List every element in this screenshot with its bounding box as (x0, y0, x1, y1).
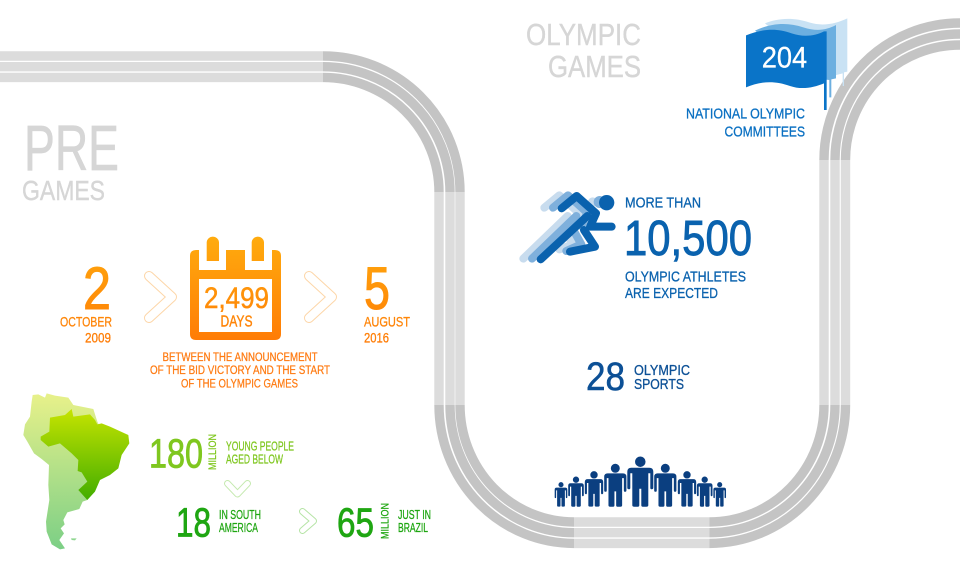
arrow: chevron to end date (309, 276, 332, 318)
icon: sprinter (523, 195, 614, 259)
date: october 2009: 2 (83, 255, 111, 322)
icon: flag with 204: 204 (762, 42, 807, 75)
arrow: chevron right (302, 512, 314, 530)
stat: 180 million young people: MILLION (207, 434, 219, 470)
heading: olympic games (526, 17, 641, 84)
stat: 28 olympic sports: SPORTS (634, 377, 684, 393)
heading: pre games: GAMES (22, 175, 105, 206)
stat: more than 10,500 athletes: 10,500 (624, 212, 752, 266)
caption: between announcement and start: OF THE BID VICTORY AND THE START (150, 365, 330, 377)
caption: between announcement and start: OF THE OLYMPIC GAMES (181, 378, 298, 390)
icon: calendar with 2,499 days: 2,499 (204, 282, 269, 315)
icon: calendar with 2,499 days (190, 237, 281, 340)
date: august 2016: AUGUST (364, 314, 410, 330)
stat: more than 10,500 athletes: OLYMPIC ATHLETES (625, 269, 746, 286)
stat: 18 in south america: 18 (176, 500, 211, 546)
heading: olympic games: GAMES (548, 49, 641, 84)
date: october 2009: OCTOBER (60, 314, 112, 330)
stat: more than 10,500 athletes: ARE EXPECTED (625, 285, 718, 302)
stat: 18 in south america: AMERICA (219, 521, 258, 535)
stat: 28 olympic sports: 28 (586, 355, 625, 399)
caption: between announcement and start (150, 352, 330, 390)
stat: 65 million in brazil: JUST IN (398, 508, 431, 522)
stat: 28 olympic sports (586, 355, 690, 399)
date: august 2016: 5 (364, 255, 390, 322)
stat: more than 10,500 athletes: MORE THAN (625, 194, 701, 212)
caption: between announcement and start: BETWEEN THE ANNOUNCEMENT (162, 352, 318, 364)
arrow: chevron down (228, 484, 248, 494)
stat: 180 million young people: YOUNG PEOPLE (226, 440, 294, 454)
stat: 18 in south america: IN SOUTH (219, 508, 261, 522)
date: august 2016 (364, 255, 410, 346)
stat: 180 million young people (149, 430, 294, 476)
heading: pre games (22, 112, 119, 206)
label: national olympic committees: COMMITTEES (724, 124, 805, 141)
stat: more than 10,500 athletes (624, 194, 752, 302)
stat: 65 million in brazil: BRAZIL (398, 521, 428, 535)
stat: 18 in south america (176, 500, 261, 546)
heading: pre games: PRE (24, 112, 119, 184)
icon: row of athletes (555, 456, 726, 507)
arrow: chevron to calendar (149, 276, 172, 318)
date: october 2009: 2009 (85, 330, 111, 346)
heading: olympic games: OLYMPIC (526, 17, 641, 52)
date: october 2009 (60, 255, 112, 346)
map: south america with brazil (23, 393, 129, 549)
stat: 65 million in brazil: MILLION (380, 503, 392, 539)
stat: 180 million young people: AGED BELOW (226, 452, 283, 466)
stat: 180 million young people: 180 (149, 430, 203, 476)
stat: 65 million in brazil (337, 500, 431, 546)
date: august 2016: 2016 (364, 330, 389, 346)
stat: 65 million in brazil: 65 (337, 500, 374, 546)
stat: 28 olympic sports: OLYMPIC (634, 363, 690, 379)
icon: flag with 204 (746, 18, 847, 110)
label: national olympic committees: NATIONAL OLYMPIC (686, 106, 805, 123)
icon: calendar with 2,499 days: DAYS (220, 314, 252, 331)
label: national olympic committees (686, 106, 805, 141)
